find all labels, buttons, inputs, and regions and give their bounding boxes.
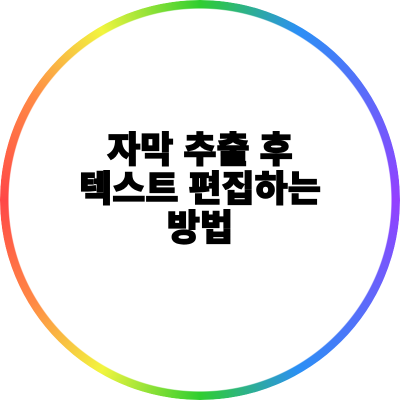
title: 자막 추출 후 <box>107 129 293 170</box>
title <box>79 129 321 248</box>
title: 방법 <box>167 207 233 248</box>
title: 텍스트 편집하는 <box>79 168 321 209</box>
